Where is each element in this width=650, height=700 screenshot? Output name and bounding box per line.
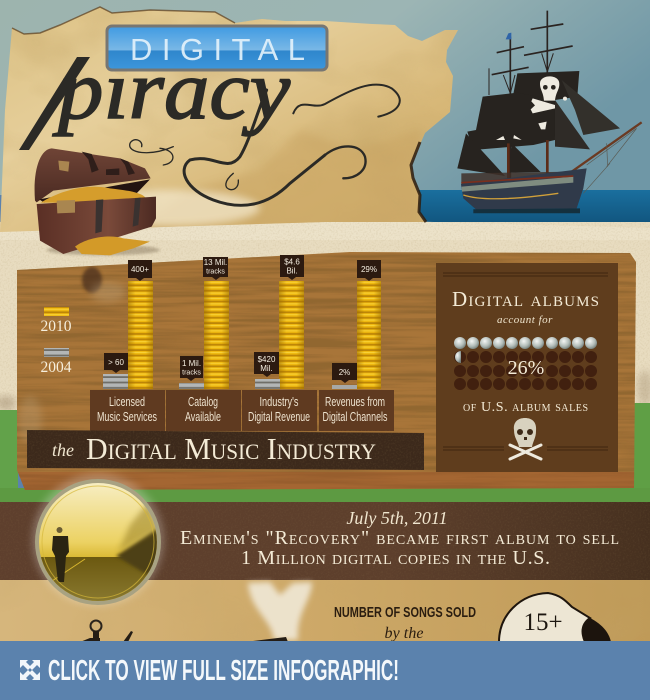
bar group: licensed music services: 400+	[131, 265, 149, 274]
legend: 2010	[40, 318, 72, 335]
panel: digital albums: of U.S. album sales	[463, 400, 588, 415]
icon: key and dark object	[80, 620, 288, 642]
bar group: catalog available: tracks	[182, 370, 201, 376]
bar group: digital channels: 2%	[339, 368, 350, 377]
smoke	[248, 582, 312, 640]
category labels: Digital Revenue	[248, 410, 310, 424]
stat badge: 15+ billion: 15+	[523, 609, 563, 636]
band: Eminem Recovery: 1 Million digital copies in the U.S.	[241, 547, 550, 569]
bar group: digital channels: 29%	[361, 265, 377, 274]
bar group: catalog available: 1 Mil.	[182, 359, 201, 368]
text: number of songs sold: NUMBER OF SONGS SOLD	[334, 604, 476, 621]
band: Eminem Recovery: Eminem's "Recovery" became first album to sell	[180, 527, 619, 549]
bar group: digital channels	[332, 260, 381, 389]
bar group: catalog available	[179, 257, 229, 389]
bar group: digital revenue: $4.6	[284, 258, 300, 266]
heading: Digital albums	[452, 287, 599, 311]
icon: treasure chest	[35, 148, 160, 255]
band: Eminem Recovery: July 5th, 2011	[346, 508, 448, 528]
percentage: 26%	[508, 357, 544, 379]
bar group: catalog available: tracks	[206, 268, 225, 276]
icon: skull and bones	[510, 418, 541, 459]
sand	[0, 219, 650, 412]
bar group: licensed music services	[103, 260, 153, 389]
icon: pirate ship	[457, 11, 642, 213]
title: piracy	[19, 44, 400, 205]
button: DIGITAL	[107, 26, 327, 70]
category labels	[90, 390, 394, 431]
banner: the Digital Music Industry: the	[52, 440, 74, 460]
text: number of songs sold	[334, 604, 476, 642]
category labels: Industry's	[260, 395, 298, 409]
banner: the Digital Music Industry: Digital Music Industry	[86, 431, 376, 466]
call to action bar	[0, 641, 650, 700]
category labels: Revenues from	[325, 395, 385, 409]
category labels: Licensed	[109, 395, 145, 409]
category labels: Catalog	[188, 395, 218, 409]
stat badge: 15+ billion: BILLION	[518, 639, 570, 653]
bar group: digital revenue: Bil.	[286, 266, 298, 276]
band: Eminem Recovery	[0, 502, 650, 580]
bar chart: digital music industry	[90, 255, 394, 431]
sea	[400, 190, 650, 230]
bar group: catalog available: 13 Mil.	[204, 258, 227, 267]
category labels: Available	[185, 410, 221, 424]
bar group: digital revenue: Mil.	[260, 364, 273, 373]
panel: wood plank	[17, 252, 637, 490]
parchment	[0, 0, 460, 235]
category labels: Music Services	[97, 410, 157, 424]
icon: expand arrows	[20, 660, 40, 680]
button: DIGITAL: DIGITAL	[130, 32, 305, 67]
call to action bar: CLICK TO VIEW FULL SIZE INFOGRAPHIC!	[48, 655, 399, 687]
legend	[40, 307, 72, 376]
bar group: digital revenue: $420	[258, 355, 276, 364]
skull flag	[496, 76, 567, 140]
category labels: Digital Channels	[322, 410, 388, 424]
grass	[0, 403, 650, 505]
legend: 2004	[40, 359, 72, 376]
panel: digital albums: account for	[497, 314, 553, 326]
banner: the Digital Music Industry	[27, 430, 424, 470]
lower parchment	[0, 580, 650, 642]
sky background	[0, 0, 650, 195]
panel: digital albums	[436, 263, 618, 472]
stat badge: 15+ billion	[499, 593, 611, 653]
bar group: licensed music services: > 60	[108, 358, 124, 367]
disc grid	[454, 351, 597, 390]
album disc	[32, 474, 164, 606]
title: piracy: piracy	[53, 44, 291, 137]
bar group: digital revenue	[254, 255, 304, 389]
text: number of songs sold: by the	[384, 625, 424, 642]
